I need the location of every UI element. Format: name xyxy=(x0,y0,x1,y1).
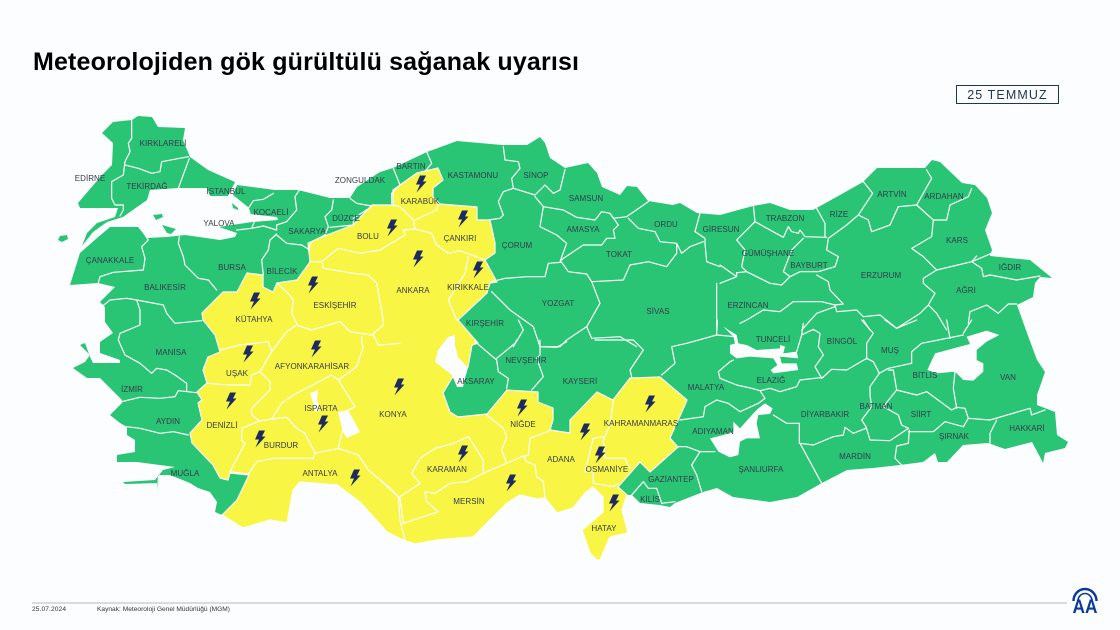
province labels: MALATYA xyxy=(688,383,725,392)
province labels: ARTVİN xyxy=(877,190,907,199)
province labels: AMASYA xyxy=(566,225,600,234)
icon: AA logo: AA xyxy=(1072,597,1098,618)
province labels: NİĞDE xyxy=(510,420,536,429)
green provinces: Anatolia xyxy=(70,137,1068,560)
icon: AA logo xyxy=(1072,589,1098,618)
province labels: ANTALYA xyxy=(302,469,338,478)
province labels: AĞRI xyxy=(956,286,976,295)
province labels: ANKARA xyxy=(396,286,430,295)
province labels: UŞAK xyxy=(226,369,249,378)
province labels: GAZİANTEP xyxy=(648,475,694,484)
province labels: ŞIRNAK xyxy=(939,432,970,441)
province labels: TUNCELİ xyxy=(756,335,790,344)
province labels: BALIKESİR xyxy=(144,283,186,292)
province labels: ZONGULDAK xyxy=(335,176,386,185)
province labels: SİNOP xyxy=(523,171,549,180)
province labels: TEKİRDAĞ xyxy=(126,182,168,191)
province labels: KARS xyxy=(946,236,968,245)
province labels: BURSA xyxy=(218,263,247,272)
province labels: KOCAELİ xyxy=(253,208,289,217)
province labels: ORDU xyxy=(654,220,678,229)
province labels: DENİZLİ xyxy=(206,421,238,430)
province labels: MERSİN xyxy=(453,497,485,506)
province labels: BARTIN xyxy=(396,162,426,171)
province labels: KAYSERİ xyxy=(563,377,597,386)
province labels: KONYA xyxy=(379,410,407,419)
province labels: DİYARBAKIR xyxy=(801,410,849,419)
province borders: northwest xyxy=(98,120,383,323)
province labels: GİRESUN xyxy=(703,225,740,234)
province labels: HATAY xyxy=(591,524,617,533)
province labels: ESKİŞEHİR xyxy=(313,301,357,310)
province labels: SİİRT xyxy=(911,410,931,419)
province labels: ERZURUM xyxy=(861,271,901,280)
province labels: ADANA xyxy=(547,455,576,464)
yellow warning provinces xyxy=(190,168,687,560)
province labels: KIRŞEHİR xyxy=(466,319,504,328)
province labels: TOKAT xyxy=(606,250,632,259)
province borders: north centre xyxy=(380,147,720,347)
province borders: south centre xyxy=(380,340,675,540)
lakes xyxy=(310,327,999,457)
province labels: ŞANLIURFA xyxy=(739,465,784,474)
lightning bolt icons xyxy=(226,176,656,512)
province labels: ÇANKIRI xyxy=(444,234,476,243)
province labels: KÜTAHYA xyxy=(236,315,273,324)
islands xyxy=(58,203,238,242)
title: Meteorolojiden gök gürültülü sağanak uyarısı xyxy=(33,48,579,76)
footer source: Kaynak: Meteoroloji Genel Müdürlüğü (MGM) xyxy=(97,606,230,613)
province borders: southwest xyxy=(118,320,400,498)
province labels: MARDİN xyxy=(839,452,871,461)
province labels: KİLİS xyxy=(640,495,660,504)
province borders: southeast xyxy=(662,320,1045,492)
province labels: BİLECİK xyxy=(266,267,298,276)
province labels: TRABZON xyxy=(766,214,804,223)
province labels: NEVŞEHİR xyxy=(505,356,547,365)
province labels: ÇANAKKALE xyxy=(86,256,134,265)
province labels: IĞDIR xyxy=(999,263,1021,272)
province labels: HAKKARİ xyxy=(1009,424,1045,433)
province labels: KIRKLARELİ xyxy=(140,139,186,148)
province labels: İZMİR xyxy=(121,385,143,394)
province labels: AFYONKARAHİSAR xyxy=(275,362,349,371)
province labels: BURDUR xyxy=(264,441,298,450)
province labels: VAN xyxy=(1000,373,1016,382)
province labels: ÇORUM xyxy=(502,241,533,250)
map: Turkey provinces xyxy=(58,116,1068,560)
date badge xyxy=(956,86,1058,104)
green provinces: Thrace xyxy=(78,116,235,246)
province labels: KIRIKKALE xyxy=(447,283,489,292)
province labels: MUĞLA xyxy=(171,469,200,478)
province labels: AKSARAY xyxy=(457,377,495,386)
province labels: KAHRAMANMARAŞ xyxy=(604,419,678,428)
province labels: EDİRNE xyxy=(75,174,105,183)
province labels: ERZİNCAN xyxy=(727,301,769,310)
province labels: ARDAHAN xyxy=(924,192,964,201)
province labels: SAMSUN xyxy=(569,194,603,203)
province labels: MANİSA xyxy=(156,348,187,357)
province labels: OSMANİYE xyxy=(586,465,628,474)
province borders: northeast xyxy=(717,170,1040,330)
province labels: GÜMÜŞHANE xyxy=(742,249,794,258)
province labels: AYDIN xyxy=(156,417,180,426)
province labels: YOZGAT xyxy=(542,299,574,308)
province labels: KARABÜK xyxy=(401,197,440,206)
province labels: KASTAMONU xyxy=(448,171,498,180)
province labels: İSTANBUL xyxy=(207,187,246,196)
province labels: SİVAS xyxy=(646,307,670,316)
province labels: YALOVA xyxy=(203,219,235,228)
province labels: KARAMAN xyxy=(427,465,467,474)
province labels: ADIYAMAN xyxy=(692,427,734,436)
province labels: RİZE xyxy=(830,210,848,219)
province labels: BİTLİS xyxy=(913,371,937,380)
province labels: DÜZCE xyxy=(332,214,360,223)
province labels: ISPARTA xyxy=(304,404,338,413)
footer rule xyxy=(32,602,1067,604)
province labels: SAKARYA xyxy=(288,227,326,236)
province labels: BATMAN xyxy=(859,402,893,411)
province labels: BAYBURT xyxy=(790,261,828,270)
date badge: 25 TEMMUZ xyxy=(967,88,1048,102)
province labels: BOLU xyxy=(357,232,379,241)
province labels xyxy=(75,139,1045,533)
province labels: BİNGÖL xyxy=(827,337,858,346)
province labels: ELAZIĞ xyxy=(757,376,785,385)
footer date: 25.07.2024 xyxy=(32,606,66,613)
province labels: MUŞ xyxy=(881,346,899,355)
